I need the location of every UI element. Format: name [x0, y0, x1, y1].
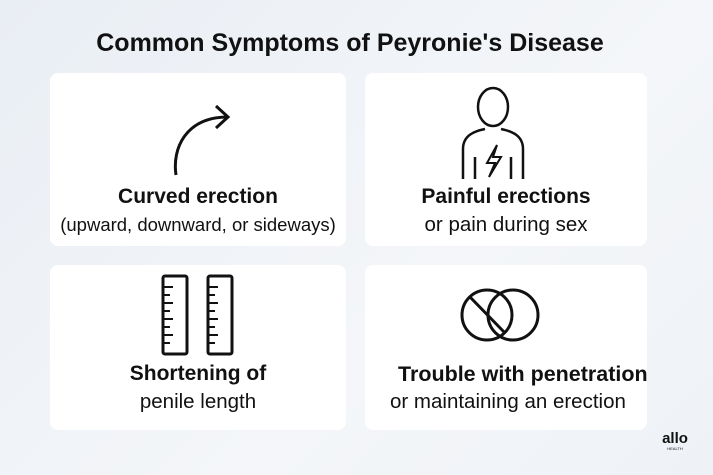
- logo: HEALTH: [667, 446, 683, 451]
- heading: Curved erection: [118, 185, 278, 208]
- panel: curved erection: [50, 73, 346, 246]
- text: or pain during sex: [425, 213, 587, 236]
- heading: Shortening of: [130, 362, 266, 385]
- title: Common Symptoms of Peyronie's Disease: [96, 29, 604, 57]
- icon: rulers: [162, 274, 234, 356]
- panel: painful erections: [365, 73, 647, 246]
- heading: Painful erections: [421, 185, 591, 208]
- icon: overlapping circles: [460, 288, 540, 342]
- text: penile length: [140, 390, 256, 413]
- icon: curved arrow: [174, 104, 230, 176]
- text: (upward, downward, or sideways): [60, 214, 336, 235]
- panel: trouble with penetration: [365, 265, 647, 430]
- logo: allo: [662, 430, 688, 447]
- text: or maintaining an erection: [390, 390, 626, 413]
- heading: Trouble with penetration: [398, 362, 648, 386]
- icon: person with lightning: [462, 86, 524, 179]
- panel: shortening: [50, 265, 346, 430]
